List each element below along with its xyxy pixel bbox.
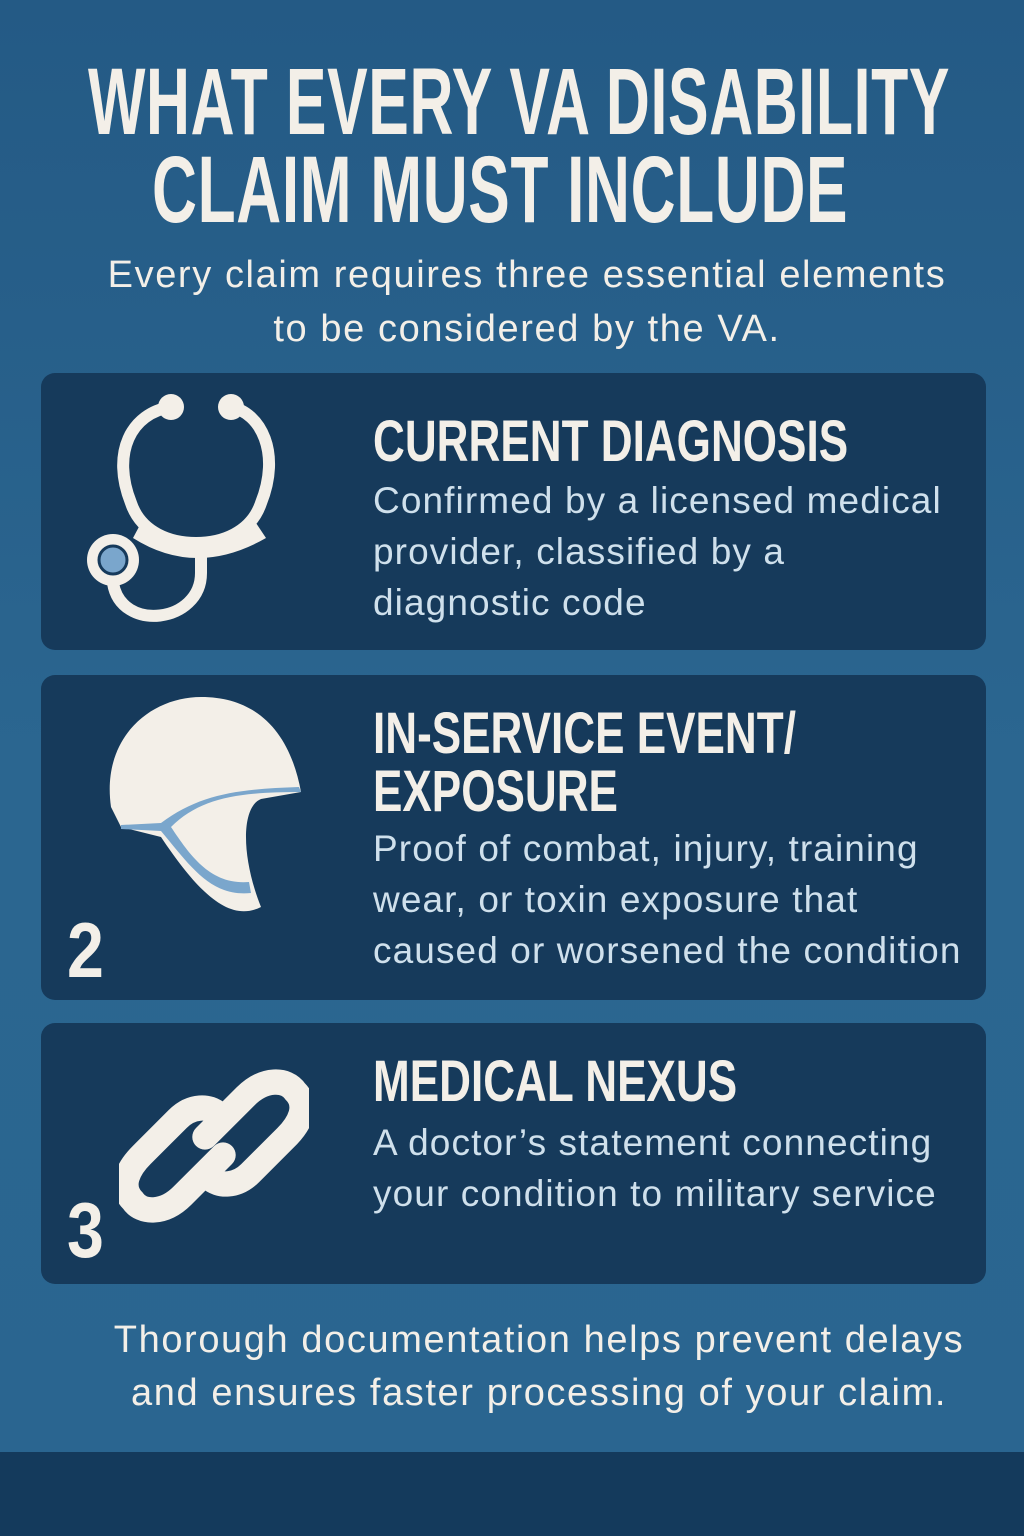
title: WHAT EVERY VA DISABILITY	[88, 49, 950, 155]
text: wear, or toxin exposure that	[373, 879, 858, 920]
text	[373, 828, 962, 971]
heading: IN-SERVICE EVENT/	[373, 701, 796, 766]
text	[373, 1122, 937, 1214]
icon: chain link	[119, 1069, 309, 1223]
heading	[373, 701, 796, 824]
heading: EXPOSURE	[373, 759, 618, 824]
footer text	[114, 1319, 964, 1414]
heading: MEDICAL NEXUS	[373, 1049, 737, 1114]
text: provider, classified by a	[373, 531, 785, 572]
number 2: 2	[67, 906, 104, 994]
subtitle	[108, 254, 946, 350]
footer text: and ensures faster processing of your claim.	[131, 1372, 947, 1414]
subtitle: Every claim requires three essential elements	[108, 254, 946, 296]
text: A doctor’s statement connecting	[373, 1122, 932, 1163]
icon: stethoscope	[87, 394, 276, 622]
panel: medical nexus	[41, 1023, 986, 1284]
text: caused or worsened the condition	[373, 930, 962, 971]
number 3: 3	[67, 1186, 104, 1274]
subtitle: to be considered by the VA.	[273, 308, 781, 350]
title	[88, 49, 950, 243]
footer text: Thorough documentation helps prevent delays	[114, 1319, 964, 1361]
text: Proof of combat, injury, training	[373, 828, 919, 869]
text: diagnostic code	[373, 582, 647, 623]
icon: helmet	[110, 697, 301, 912]
panel: current diagnosis	[41, 373, 986, 650]
title: CLAIM MUST INCLUDE	[152, 137, 848, 243]
heading: CURRENT DIAGNOSIS	[373, 409, 848, 474]
text	[373, 480, 942, 623]
panel: in-service event	[41, 675, 986, 1000]
text: Confirmed by a licensed medical	[373, 480, 942, 521]
text: your condition to military service	[373, 1173, 937, 1214]
